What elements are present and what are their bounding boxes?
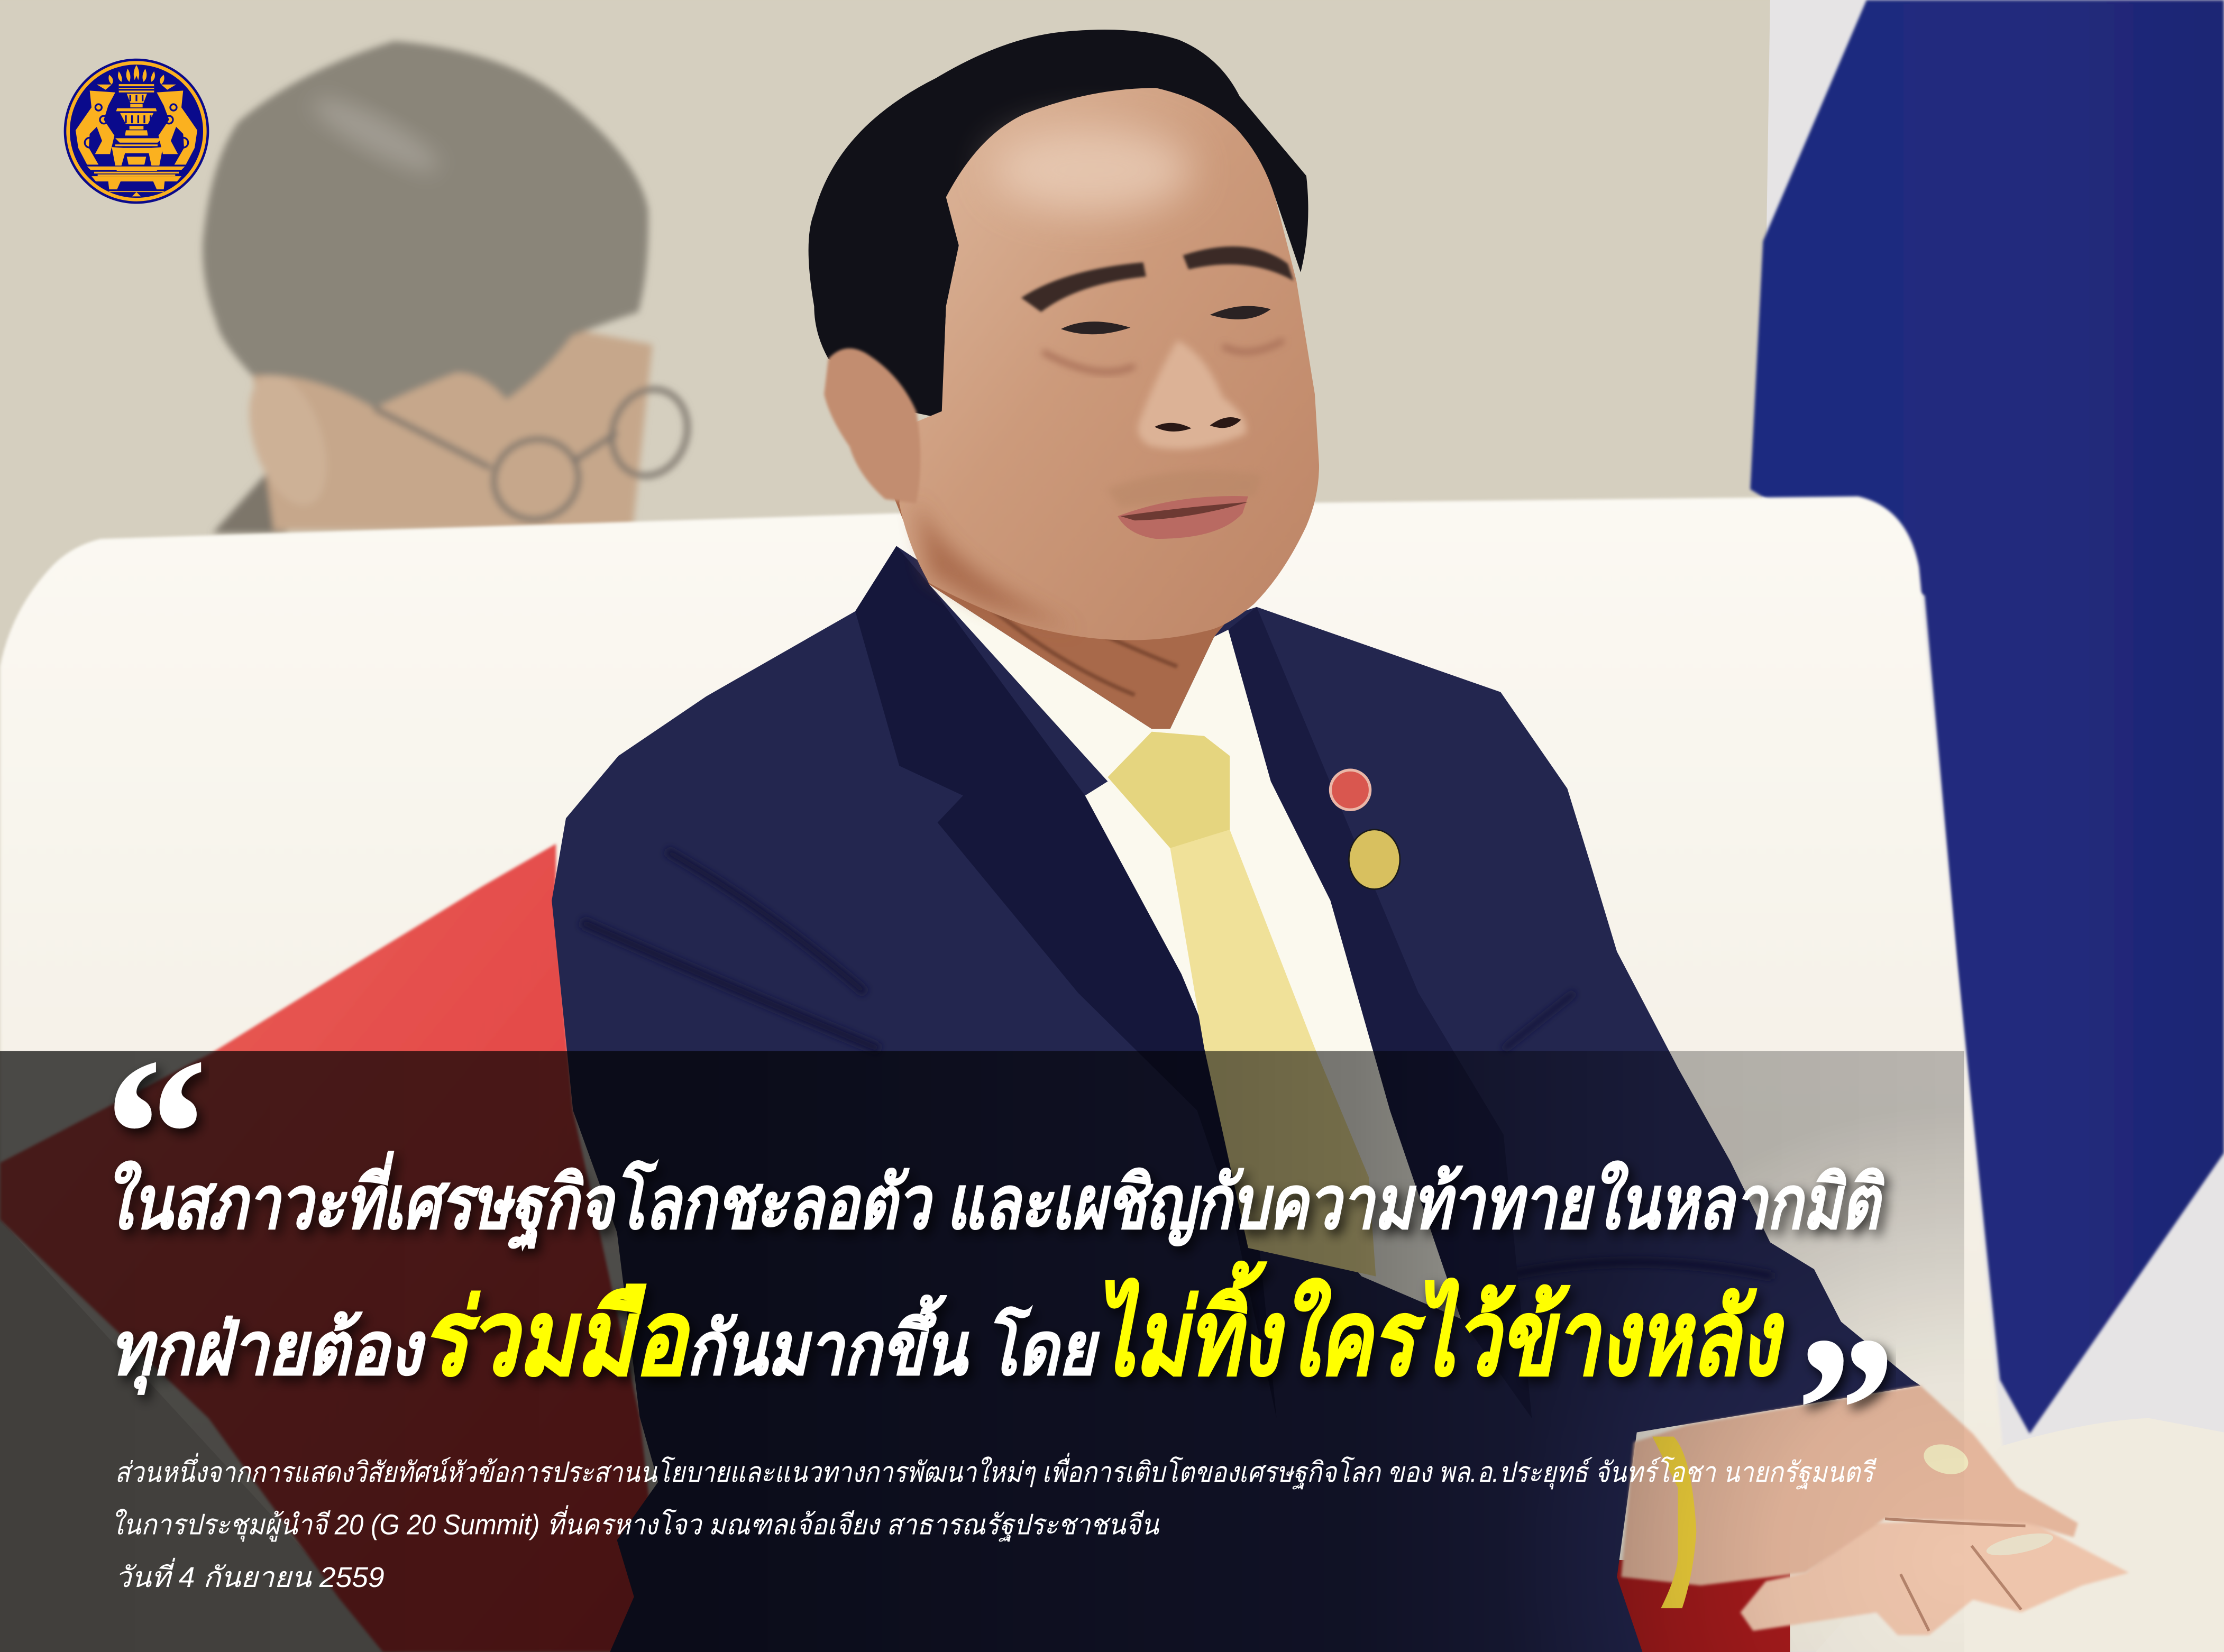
headline line 2: ทุกฝ่ายต้อง [109,1308,426,1395]
forehead highlight [993,127,1192,213]
main figure suit [552,546,1920,1652]
dark overlay band [0,1051,1964,1652]
headline line 2: กันมากขึ้น โดย [687,1295,1100,1390]
upper hand [1621,1385,2078,1585]
eyebrow right [1183,246,1294,281]
grey lower left chair [0,1219,397,1652]
eyebrow left [1021,262,1146,312]
caption text [111,1452,1877,1593]
headline line 2 [109,1261,1784,1397]
mouth [1118,496,1248,539]
lapel pin red [1330,770,1370,810]
seal navy details [85,87,188,148]
highlight: ร่วมมือ: ร่วมมือ [421,1280,691,1397]
highlight: ไม่ทิ้งใครไว้ข้างหลัง: ไม่ทิ้งใครไว้ข้างหลัง [1095,1261,1784,1397]
yellow wristband [1652,1437,1696,1608]
ring [1920,1440,1972,1479]
tie knot [1108,732,1230,848]
nose [1138,341,1246,449]
closing quotation mark: ” [1784,1293,1891,1528]
shirt [929,584,1461,1319]
background man hair highlight [305,86,446,183]
hair [809,30,1308,418]
finger lines [1885,1519,2026,1631]
seal gold ring [68,63,205,199]
left lapel [855,546,1277,1418]
background man hair [203,41,648,408]
face [899,88,1319,640]
government seal logo [64,59,209,204]
background man face [252,329,653,530]
moustache shadow [1106,470,1262,508]
ring lower [1985,1529,2055,1560]
jaw shadow [915,497,1078,631]
red pillow [0,844,666,1652]
background man blurred [203,41,699,533]
caption text: ส่วนหนึ่งจากการแสดงวิสัยทัศน์หัวข้อการประสานนโยบายและแนวทางการพัฒนาใหม่ๆ เพื่อการเติบโตของเศรษฐกิจโลก ของ พล.อ.ประยุทธ์ จันทร์โอชา นายกรัฐมนตรี [115,1452,1877,1489]
under eye shadow [1042,341,1284,372]
lower hand [1741,1519,2129,1635]
suit shading [582,851,1773,1277]
seal ornaments [76,65,197,196]
background man jacket [213,465,287,533]
caption text: วันที่ 4 กันยายน 2559 [115,1557,385,1593]
sofa seat right [1816,1418,2224,1652]
navy flag [1750,0,2224,1434]
eye right [1210,306,1271,319]
background man ear [234,364,341,515]
neck wrinkles [993,595,1177,695]
ear [824,348,920,503]
nostrils [1155,417,1241,432]
eye left [1061,322,1130,334]
neck [894,497,1248,729]
background man glasses [374,379,699,531]
white curtain strip and right wall [1745,0,2224,1652]
red fabric under hands [1617,1560,1790,1652]
caption text: ในการประชุมผู้นำจี 20 (G 20 Summit) ที่นครหางโจว มณฑลเจ้อเจียง สาธารณรัฐประชาชนจีน [111,1505,1159,1542]
lapel pin gold [1349,830,1400,889]
opening quotation mark: “ [94,1013,204,1256]
necktie [1108,732,1376,1277]
seal disc [64,59,209,204]
right lapel [1228,607,1532,1418]
sofa back [0,497,2003,1652]
